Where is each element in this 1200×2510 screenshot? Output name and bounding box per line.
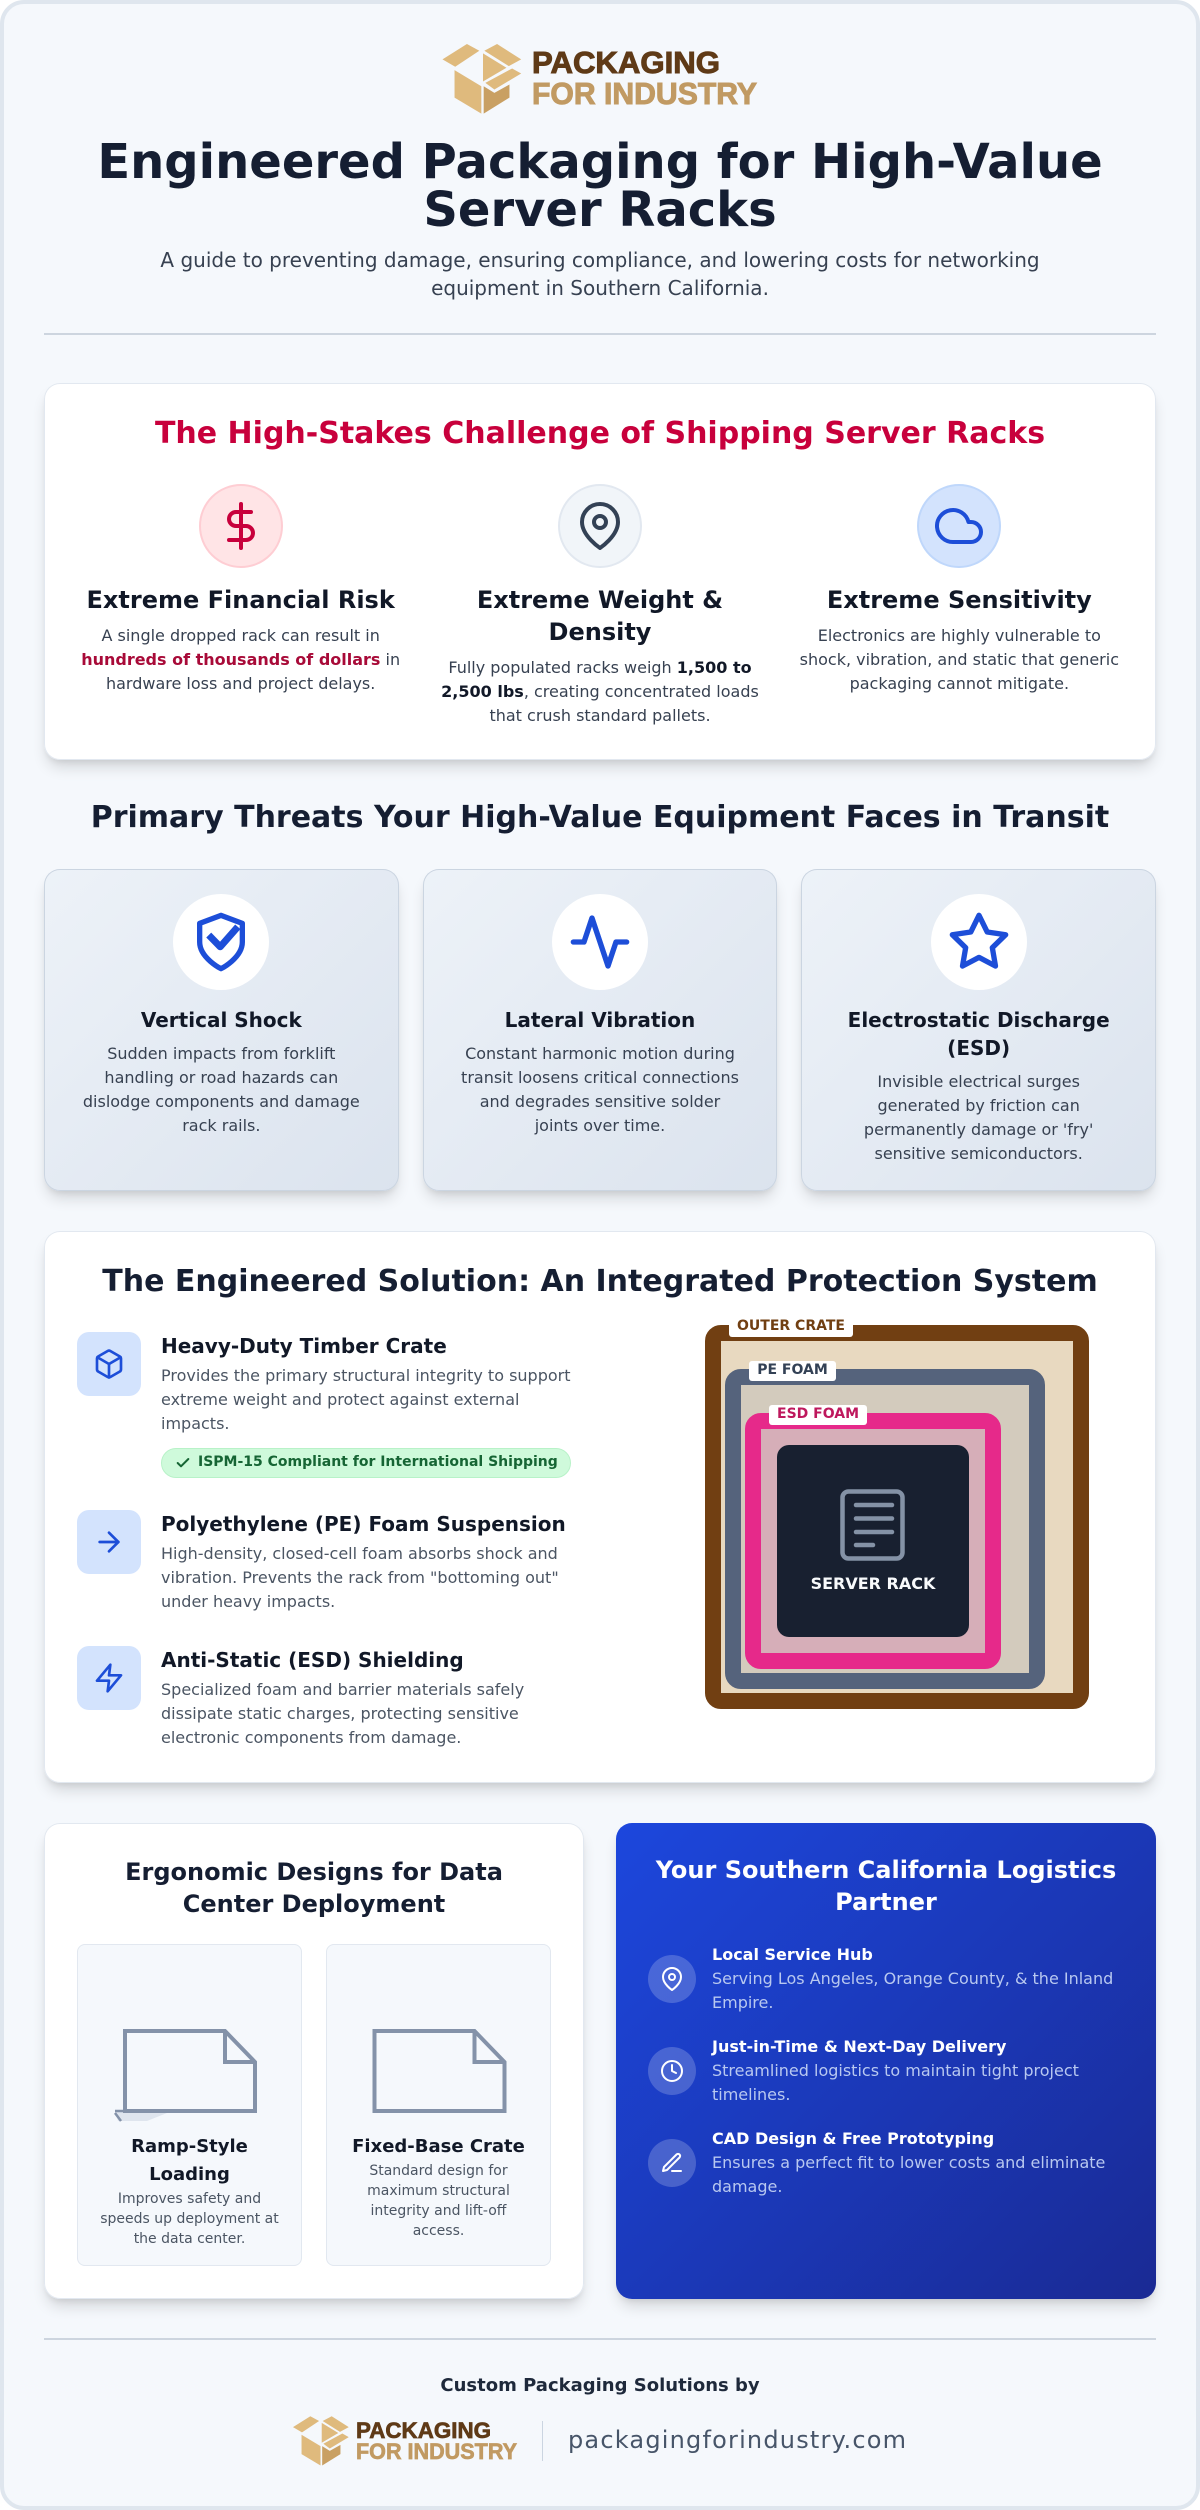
- heading: partner: [656, 1856, 1116, 1916]
- heading: ergonomic: [125, 1858, 503, 1918]
- icon: pen: [648, 2139, 696, 2187]
- column: sensitivity: [800, 484, 1119, 693]
- column: weight and density: Density: [549, 618, 651, 646]
- logo wordmark: PACKAGING: [532, 45, 720, 80]
- sub-card: fixed-base: [326, 1944, 551, 2266]
- icon: star: [931, 894, 1027, 990]
- heading: primary threats: Primary Threats Your High-Value Equipment Faces in Transit: [91, 800, 1109, 835]
- item: ESD shielding: Specialized foam and barrier materials safely: [161, 1680, 524, 1699]
- icon: activity pulse: [552, 894, 648, 990]
- label: outer crate: [729, 1317, 853, 1337]
- panel: lateral vibration: [423, 869, 777, 1191]
- text: fixed-base: integrity and lift-off: [371, 2203, 506, 2219]
- text: fixed-base: Fixed-Base Crate: [352, 2136, 525, 2157]
- subtitle: A guide to preventing damage, ensuring compliance, and lowering costs for networking: [160, 248, 1040, 272]
- panel: electrostatic discharge: (ESD): [947, 1036, 1010, 1060]
- column: sensitivity: shock, vibration, and static that generic: [800, 650, 1119, 669]
- panel: electrostatic discharge: Electrostatic Discharge: [848, 1008, 1110, 1032]
- panel: lateral vibration: Constant harmonic motion during: [465, 1044, 735, 1063]
- column: sensitivity: packaging cannot mitigate.: [850, 674, 1069, 693]
- column: financial risk: A single dropped rack can result in: [101, 626, 380, 645]
- item: PE foam: [161, 1512, 566, 1611]
- item: timber crate: extreme weight and protect against external: [161, 1390, 519, 1409]
- wordmark small: PACKAGING: [356, 2418, 491, 2443]
- panel: vertical shock: [44, 869, 399, 1191]
- footer text: Custom Packaging Solutions by: [440, 2375, 760, 2396]
- icon: cube: [77, 1332, 141, 1396]
- text: local hub: Serving Los Angeles, Orange County, & the Inland: [712, 1969, 1113, 1988]
- panel: electrostatic discharge: [801, 869, 1156, 1191]
- panel: vertical shock: Sudden impacts from forklift: [107, 1044, 335, 1063]
- wordmark small: FOR INDUSTRY: [356, 2439, 517, 2464]
- panel: logistics partner: [616, 1823, 1156, 2299]
- icon: clock: [648, 2047, 696, 2095]
- heading: challenge: The High-Stakes Challenge of Shipping Server Racks: [155, 416, 1045, 451]
- text: CAD design: damage.: [712, 2177, 782, 2196]
- column: financial risk: [81, 484, 400, 693]
- column: weight and density: [441, 484, 759, 725]
- subtitle: equipment in Southern California.: [431, 276, 769, 300]
- panel: vertical shock: rack rails.: [182, 1116, 260, 1135]
- diagram: layered crate: [705, 1325, 1089, 1709]
- panel: vertical shock: Vertical Shock: [141, 1008, 302, 1032]
- text: delivery: Streamlined logistics to maintain tight project: [712, 2061, 1079, 2080]
- column: weight and density: 2,500 lbs, creating concentrated loads: [441, 682, 759, 701]
- subtitle: [160, 248, 1040, 300]
- text: ramp-style: speeds up deployment at: [100, 2211, 279, 2227]
- panel: lateral vibration: joints over time.: [535, 1116, 665, 1135]
- item: PE foam: under heavy impacts.: [161, 1592, 335, 1611]
- label: ESD foam: [769, 1405, 867, 1425]
- column: financial risk: hardware loss and project delays.: [106, 674, 375, 693]
- sub-card: ramp-style: [77, 1944, 302, 2266]
- text: local hub: Empire.: [712, 1993, 773, 2012]
- item: ESD shielding: electronic components from damage.: [161, 1728, 461, 1747]
- text: ramp-style: Ramp-Style: [131, 2136, 248, 2157]
- layer: ESD foam: [745, 1413, 1001, 1669]
- badge: ISPM-15: ISPM-15 Compliant for International Shipping: [198, 1454, 558, 1470]
- heading: partner: Partner: [835, 1888, 937, 1916]
- icon: cloud: [917, 484, 1001, 568]
- text: CAD design: CAD Design & Free Prototyping: [712, 2129, 994, 2148]
- panel: electrostatic discharge: generated by friction can: [877, 1096, 1080, 1115]
- item: PE foam: Polyethylene (PE) Foam Suspension: [161, 1512, 566, 1536]
- heading: partner: Your Southern California Logistics: [656, 1856, 1116, 1884]
- heading: solution: The Engineered Solution: An Integrated Protection System: [102, 1264, 1098, 1299]
- text: ramp-style: Improves safety and: [118, 2191, 261, 2207]
- icon: ramp crate: [114, 2029, 257, 2122]
- icon: server document: [840, 1489, 905, 1561]
- panel: lateral vibration: transit loosens critical connections: [461, 1068, 739, 1087]
- column: weight and density: Fully populated racks weigh 1,500 to: [448, 658, 752, 677]
- item: ESD shielding: Anti-Static (ESD) Shielding: [161, 1648, 464, 1672]
- column: weight and density: Extreme Weight &: [477, 586, 723, 614]
- column: financial risk: hundreds of thousands of dollars in: [81, 650, 400, 669]
- text: delivery: Just-in-Time & Next-Day Delivery: [712, 2037, 1006, 2056]
- icon: map pin: [558, 484, 642, 568]
- column: financial risk: Extreme Financial Risk: [87, 586, 395, 614]
- column: sensitivity: Electronics are highly vulnerable to: [818, 626, 1101, 645]
- item: timber crate: Heavy-Duty Timber Crate: [161, 1334, 447, 1358]
- heading: ergonomic: Center Deployment: [183, 1890, 445, 1918]
- panel: electrostatic discharge: Invisible electrical surges: [877, 1072, 1080, 1091]
- text: ramp-style: [100, 2136, 279, 2247]
- text: ramp-style: the data center.: [134, 2231, 245, 2247]
- text: CAD design: Ensures a perfect fit to lower costs and eliminate: [712, 2153, 1105, 2172]
- text: fixed-base: maximum structural: [367, 2183, 510, 2199]
- label: server rack: SERVER RACK: [811, 1574, 935, 1593]
- icon: lightning bolt: [77, 1646, 141, 1710]
- footer logo: [293, 2416, 518, 2466]
- panel: engineered solution: [44, 1231, 1156, 1783]
- panel: lateral vibration: and degrades sensitive solder: [480, 1092, 720, 1111]
- logo wordmark: FOR INDUSTRY: [532, 76, 757, 111]
- panel: ergonomic designs: [44, 1823, 584, 2299]
- label: PE foam: PE FOAM: [757, 1362, 828, 1378]
- panel: lateral vibration: Lateral Vibration: [505, 1008, 695, 1032]
- item: timber crate: Provides the primary structural integrity to support: [161, 1366, 571, 1385]
- text: local hub: [712, 1945, 1113, 2012]
- panel: vertical shock: handling or road hazards can: [104, 1068, 338, 1087]
- column: sensitivity: Extreme Sensitivity: [827, 586, 1092, 614]
- text: local hub: Local Service Hub: [712, 1945, 873, 1964]
- panel: electrostatic discharge: sensitive semiconductors.: [874, 1144, 1083, 1163]
- icon: shield check: [173, 894, 269, 990]
- item: PE foam: vibration. Prevents the rack from "bottoming out": [161, 1568, 559, 1587]
- heading: ergonomic: Ergonomic Designs for Data: [125, 1858, 503, 1886]
- text: fixed-base: Standard design for: [369, 2163, 508, 2179]
- logo wordmark: [532, 45, 758, 111]
- panel: high-stakes challenge: [44, 383, 1156, 760]
- item: timber crate: [161, 1334, 571, 1478]
- wordmark small: [356, 2418, 518, 2464]
- text: delivery: timelines.: [712, 2085, 790, 2104]
- text: fixed-base: access.: [413, 2223, 464, 2239]
- title: [97, 134, 1103, 238]
- item: PE foam: High-density, closed-cell foam absorbs shock and: [161, 1544, 558, 1563]
- badge: ISPM-15: [161, 1448, 571, 1478]
- item: ESD shielding: dissipate static charges, protecting sensitive: [161, 1704, 519, 1723]
- label: ESD foam: ESD FOAM: [777, 1406, 859, 1422]
- panel: electrostatic discharge: permanently damage or 'fry': [864, 1120, 1093, 1139]
- footer URL: packagingforindustry.com: [568, 2426, 907, 2454]
- label: outer crate: OUTER CRATE: [737, 1318, 845, 1334]
- text: CAD design: [712, 2129, 1105, 2196]
- item: timber crate: impacts.: [161, 1414, 229, 1433]
- column: weight and density: that crush standard pallets.: [489, 706, 711, 725]
- title: Engineered Packaging for High-Value: [97, 134, 1103, 190]
- header logo: [442, 44, 758, 114]
- icon: open box logo small: [293, 2416, 349, 2466]
- text: ramp-style: Loading: [149, 2164, 230, 2185]
- layer: PE foam: [725, 1369, 1045, 1689]
- icon: open box logo: [442, 44, 522, 114]
- icon: fixed crate: [372, 2029, 506, 2113]
- icon: dollar: [199, 484, 283, 568]
- text: delivery: [711, 2037, 1079, 2104]
- panel: vertical shock: dislodge components and damage: [83, 1092, 360, 1111]
- label: PE foam: [749, 1361, 836, 1381]
- text: fixed-base: [352, 2136, 525, 2239]
- icon: location: [648, 1955, 696, 2003]
- item: ESD shielding: [161, 1648, 524, 1747]
- server rack: [777, 1445, 969, 1637]
- title: Server Racks: [423, 182, 777, 238]
- icon: arrow right: [77, 1510, 141, 1574]
